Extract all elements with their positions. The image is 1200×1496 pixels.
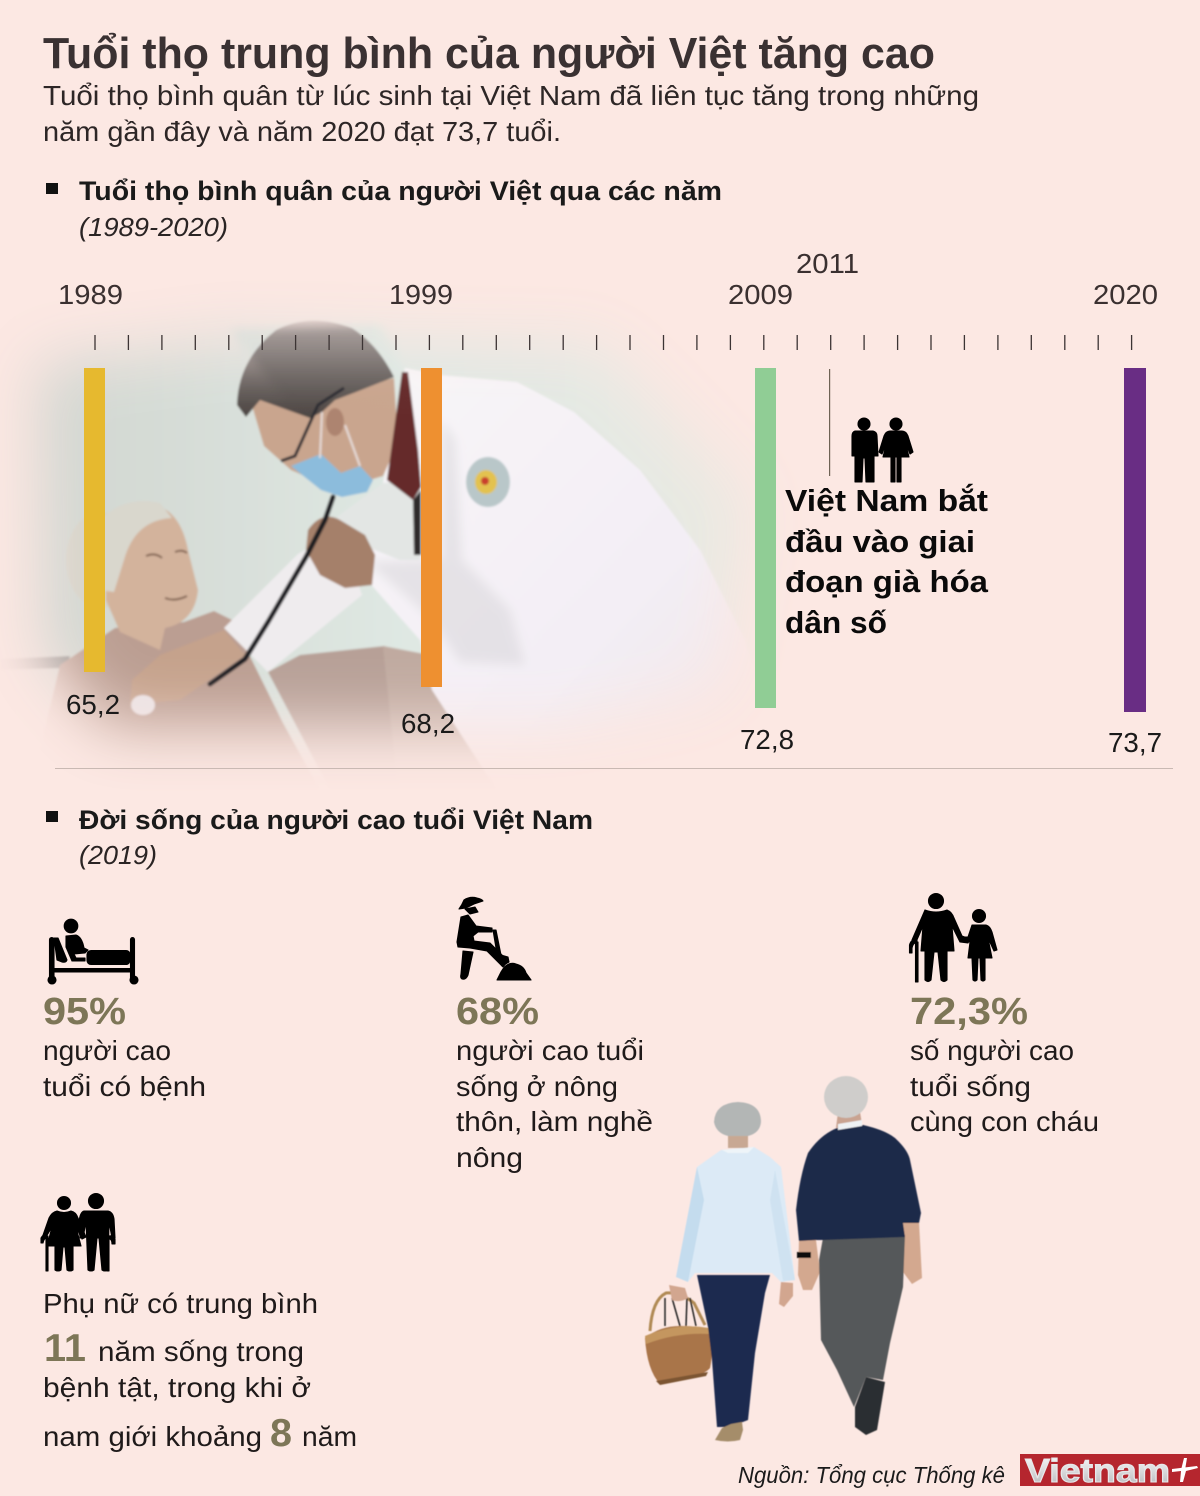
year labels: 2020	[1093, 279, 1158, 310]
section heading: life expectancy: Tuổi thọ bình quân của người Việt qua các năm	[79, 176, 722, 206]
bar 2009	[755, 368, 776, 708]
year labels	[58, 248, 1158, 310]
section heading: life expectancy: (1989-2020)	[79, 212, 228, 242]
stat: 95 percent ill: 95%	[43, 991, 126, 1033]
timeline chart	[58, 248, 1162, 758]
stat: 68 percent rural farming: sống ở nông	[456, 1071, 618, 1102]
source: Nguồn: Tổng cục Thống kê	[738, 1462, 1005, 1488]
stat: 72.3 percent with family	[910, 894, 1099, 1137]
photo: elderly couple walking	[645, 1076, 922, 1442]
logo: Vietnam+: Vietnam	[1025, 1452, 1170, 1489]
section heading: elderly life: Đời sống của người cao tuổi Việt Nam	[79, 805, 593, 835]
callout: 2011 population ageing	[785, 369, 989, 640]
year labels: 1999	[389, 279, 453, 310]
stat: years living with illness: bệnh tật, trong khi ở	[43, 1372, 311, 1403]
year labels: 2011	[796, 248, 859, 279]
section heading: elderly life	[46, 805, 593, 870]
stat: 68 percent rural farming: 68%	[456, 991, 539, 1033]
section heading: life expectancy	[46, 176, 722, 242]
callout: 2011 population ageing: dân số	[785, 605, 887, 640]
stat: 68 percent rural farming: thôn, làm nghề	[456, 1106, 653, 1137]
callout: 2011 population ageing: Việt Nam bắt	[785, 482, 988, 518]
icon: man and woman	[852, 418, 913, 482]
stat: years living with illness: 11	[44, 1327, 86, 1370]
bar 1999	[421, 368, 442, 687]
section heading: elderly life: (2019)	[79, 840, 157, 870]
stat: years living with illness: năm sống trong	[98, 1336, 304, 1367]
timeline ticks	[95, 335, 1132, 350]
year labels: 2009	[728, 279, 793, 310]
photo: doctor examining elderly patient	[13, 318, 746, 762]
stat: years living with illness: 8	[270, 1412, 292, 1455]
value labels: 73,7	[1108, 727, 1162, 758]
title: Tuổi thọ trung bình của người Việt tăng cao	[43, 29, 935, 78]
icon: farmer digging	[457, 897, 531, 980]
icon: elderly couple	[41, 1194, 115, 1271]
stat: 72.3 percent with family: số người cao	[910, 1035, 1074, 1066]
icon: elder with child	[910, 894, 997, 982]
icon: patient in bed	[48, 919, 138, 984]
value labels: 72,8	[740, 724, 794, 755]
stat: 95 percent ill: tuổi có bệnh	[43, 1071, 206, 1102]
value labels: 68,2	[401, 708, 455, 739]
value labels: 65,2	[66, 689, 120, 720]
subtitle: Tuổi thọ bình quân từ lúc sinh tại Việt Nam đã liên tục tăng trong những	[43, 80, 979, 111]
callout: 2011 population ageing: đầu vào giai	[785, 524, 975, 559]
bar 2020	[1124, 368, 1146, 712]
man figure	[796, 1076, 922, 1435]
year labels: 1989	[58, 279, 123, 310]
subtitle	[43, 80, 979, 147]
stat: 68 percent rural farming	[456, 897, 653, 1173]
stat: 95 percent ill	[43, 919, 206, 1102]
woman figure with basket	[645, 1102, 795, 1442]
stat: years living with illness: năm	[302, 1421, 357, 1452]
callout: 2011 population ageing: đoạn già hóa	[785, 564, 989, 599]
stat: 95 percent ill: người cao	[43, 1035, 171, 1066]
subtitle: năm gần đây và năm 2020 đạt 73,7 tuổi.	[43, 116, 561, 147]
stat: years living with illness: nam giới khoảng	[43, 1421, 262, 1452]
bar 1989	[84, 368, 105, 672]
stat: 68 percent rural farming: người cao tuổi	[456, 1035, 644, 1066]
stat: 72.3 percent with family: cùng con cháu	[910, 1106, 1099, 1137]
value labels	[66, 689, 1162, 758]
stat: 72.3 percent with family: tuổi sống	[910, 1071, 1031, 1102]
stat: years living with illness: Phụ nữ có trung bình	[43, 1288, 318, 1319]
stat: 68 percent rural farming: nông	[456, 1142, 523, 1173]
stat: 72.3 percent with family: 72,3%	[910, 991, 1028, 1033]
stat: years living with illness	[41, 1194, 357, 1455]
